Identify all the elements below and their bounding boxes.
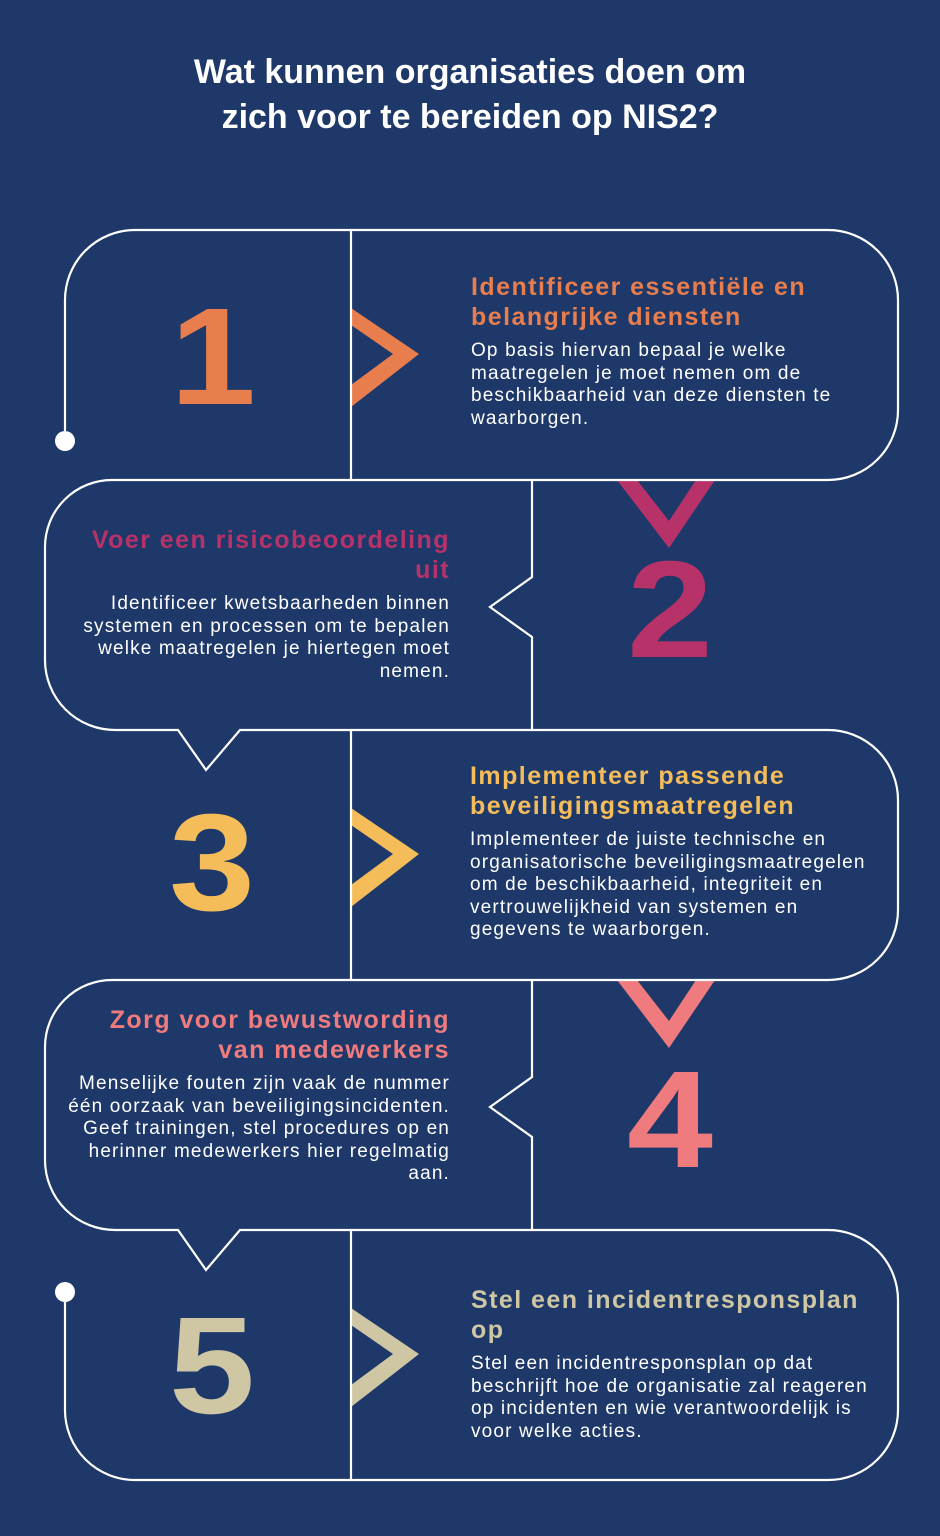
text block 2: Voer een risicobeoordeling (92, 526, 450, 554)
text block 2: uit (415, 556, 450, 584)
dot bottom (55, 1282, 75, 1302)
text block 3 (470, 762, 866, 940)
dot top (55, 431, 75, 451)
text block 5: op incidenten en wie verantwoordelijk is (471, 1398, 852, 1419)
text block 1: Identificeer essentiële en (471, 273, 806, 301)
text block 4: Zorg voor bewustwording (110, 1006, 450, 1034)
text block 4: herinner medewerkers hier regelmatig (89, 1140, 450, 1162)
text block 4: Geef trainingen, stel procedures op en (83, 1118, 450, 1139)
outline path (45, 230, 898, 1480)
text block 1: waarborgen. (471, 408, 589, 428)
text block 3: Implementeer passende (470, 762, 785, 790)
text block 2: nemen. (380, 660, 450, 682)
text block 5: op (471, 1316, 504, 1344)
text block 3: organisatorische beveiligingsmaatregelen (470, 852, 866, 872)
title: zich voor te bereiden op NIS2? (222, 98, 718, 136)
text block 3: vertrouwelijkheid van systemen en (470, 896, 798, 918)
text block 5: Stel een incidentresponsplan op dat (471, 1353, 813, 1374)
text block 5: beschrijft hoe de organisatie zal reageren (471, 1376, 868, 1396)
number 4: 4 (627, 1043, 713, 1197)
text block 5: voor welke acties. (471, 1420, 643, 1442)
text block 1 (471, 273, 831, 428)
text block 2 (83, 526, 450, 682)
chevron 2 (617, 480, 715, 548)
text block 3: beveiligingsmaatregelen (470, 792, 795, 820)
text block 2: welke maatregelen je hiertegen moet (98, 638, 450, 659)
text block 5: Stel een incidentresponsplan (471, 1286, 859, 1314)
text block 1: belangrijke diensten (471, 303, 742, 331)
title: Wat kunnen organisaties doen om (194, 53, 746, 91)
text block 1: beschikbaarheid van deze diensten te (471, 385, 831, 406)
text block 3: Implementeer de juiste technische en (470, 829, 826, 850)
number 3: 3 (169, 786, 255, 940)
number 1: 1 (170, 280, 256, 434)
text block 4: Menselijke fouten zijn vaak de nummer (79, 1073, 450, 1094)
text block 4 (68, 1006, 450, 1184)
text block 3: gegevens te waarborgen. (470, 919, 711, 940)
text block 4: aan. (408, 1163, 450, 1184)
text block 5 (471, 1286, 868, 1442)
text block 3: om de beschikbaarheid, integriteit en (470, 874, 823, 895)
number 5: 5 (169, 1289, 255, 1443)
chevron 4 (617, 980, 715, 1048)
chevron 3 (351, 808, 419, 907)
text block 2: systemen en processen om te bepalen (83, 616, 450, 636)
text block 1: maatregelen je moet nemen om de (471, 362, 801, 384)
chevron 1 (351, 308, 419, 407)
text block 4: van medewerkers (218, 1036, 450, 1064)
chevron 5 (351, 1308, 419, 1407)
number 2: 2 (627, 533, 713, 687)
title (194, 53, 746, 136)
text block 2: Identificeer kwetsbaarheden binnen (111, 593, 450, 614)
text block 1: Op basis hiervan bepaal je welke (471, 340, 787, 361)
text block 4: één oorzaak van beveiligingsincidenten. (68, 1096, 450, 1116)
